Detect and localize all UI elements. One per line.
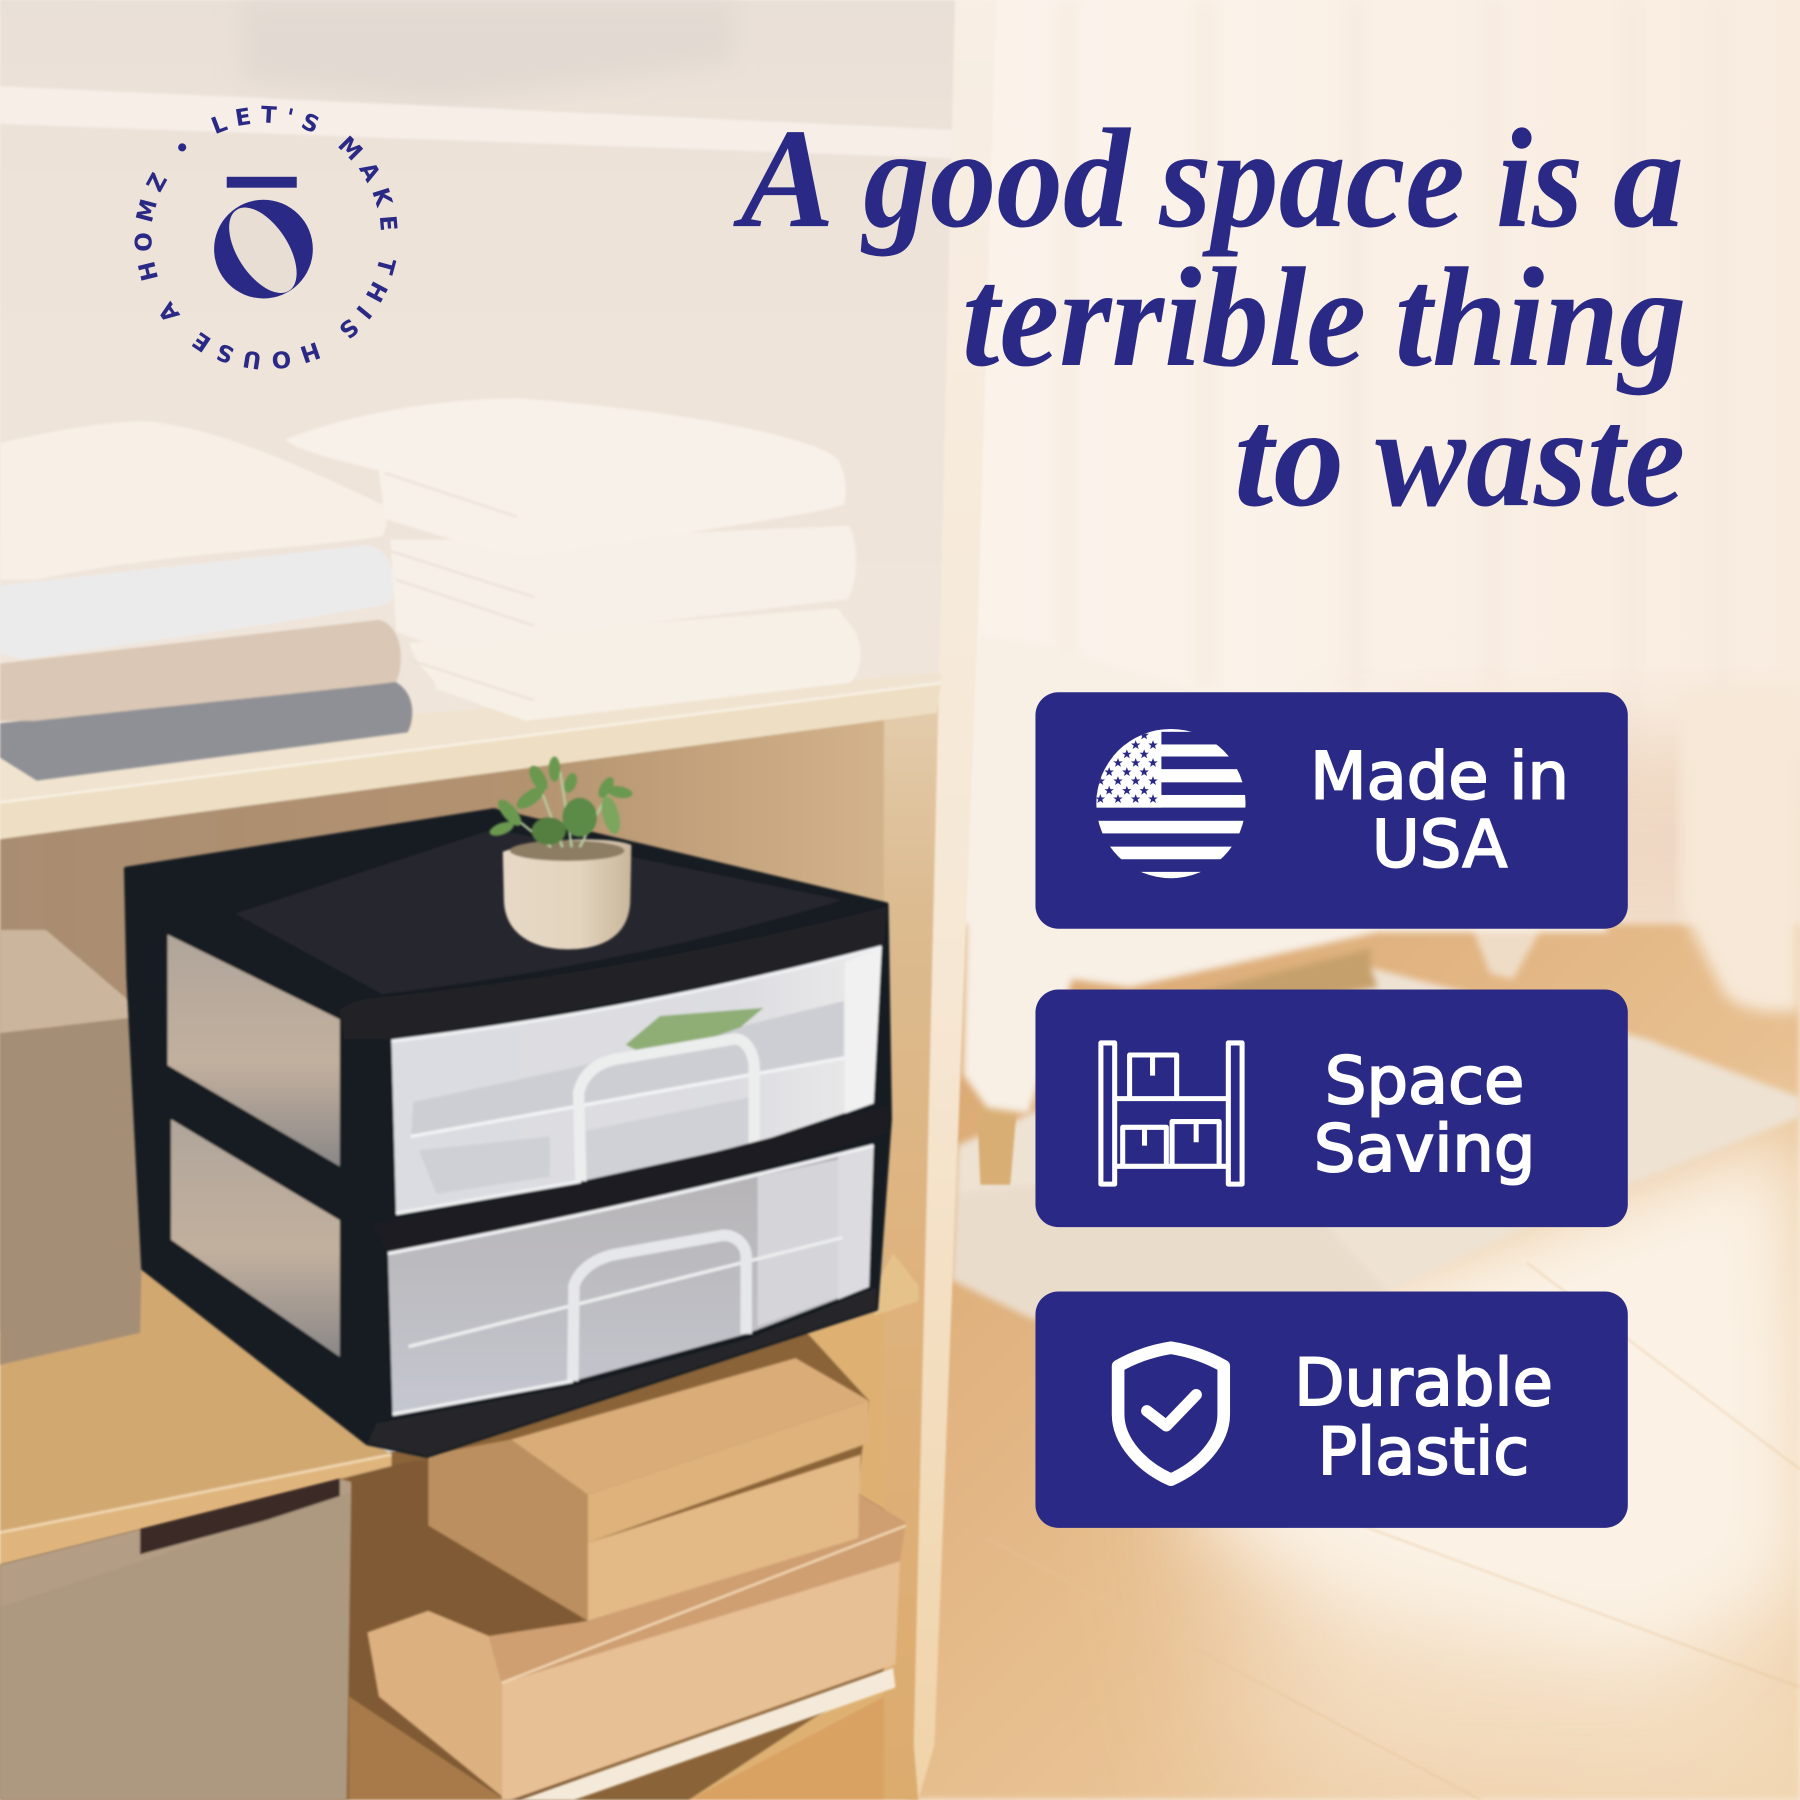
headline: space [1158,99,1465,257]
panel: space saving [1035,990,1628,1227]
cardboard box lower [367,1493,906,1800]
lower shelf [0,1254,918,1565]
floor boards [987,1263,1800,1800]
left stack [0,421,412,781]
label: made in USA: USA [1372,807,1507,883]
leaves [488,757,633,847]
label: space saving: Saving [1314,1111,1535,1187]
side window lower [171,1119,340,1357]
wall warm shade [1355,735,1800,953]
icon: shield with check [1118,1348,1224,1480]
drawer lower [388,1146,874,1414]
middle bar [372,1105,887,1254]
headline [733,99,1686,536]
light cabinet edge [914,0,996,1800]
basket lower left [0,1479,351,1800]
logo mark [214,177,313,304]
label: durable plastic: Durable [1294,1345,1553,1421]
middle shelf [0,673,941,839]
headline: thing [1395,238,1686,396]
bed leg [977,1105,1017,1185]
top shelf [0,86,953,158]
headline: a [1613,99,1684,257]
shelf cabinet [0,0,996,1800]
plant reflection [626,1008,763,1054]
logo ring text: LET'S MAKE THIS HOUSE A HOMZ • [134,106,398,370]
drawer unit [126,810,890,1456]
lower dark compartment [0,1286,918,1800]
cardboard box upper [428,1358,869,1621]
potted plant [488,757,633,949]
logo badge [134,106,398,370]
wooden floor [907,924,1800,1800]
curtain wall [1068,0,1722,918]
basket left [0,930,147,1365]
label: made in USA: Made in [1310,738,1569,814]
upper compartment shading [241,0,735,103]
panel: durable plastic [1035,1291,1628,1528]
label: space saving: Space [1325,1043,1524,1119]
baskets and boxes [0,930,906,1800]
icon: US flag [1096,729,1246,879]
headline: terrible [962,238,1366,396]
folded towels [0,398,861,781]
headline: to [1234,378,1344,536]
floor highlight [1182,1125,1800,1800]
panel: made in USA [1035,692,1628,929]
bottom bar [367,1288,876,1456]
headline: A [733,99,835,257]
curtain right [1681,689,1800,1012]
side window upper [168,934,340,1166]
bed [963,635,1607,1114]
headline: good [860,99,1131,257]
drawer upper [391,947,882,1213]
body [126,810,890,1456]
top surface [235,829,843,994]
pot [503,839,631,949]
dark back under middle shelf [0,712,941,1412]
right stack [285,398,861,721]
headline: waste [1375,378,1685,536]
right side panel [884,689,962,1800]
icon: shelf with boxes [1101,1043,1242,1184]
label: durable plastic: Plastic [1318,1414,1529,1490]
headline: is [1496,99,1583,257]
rug [952,968,1800,1319]
